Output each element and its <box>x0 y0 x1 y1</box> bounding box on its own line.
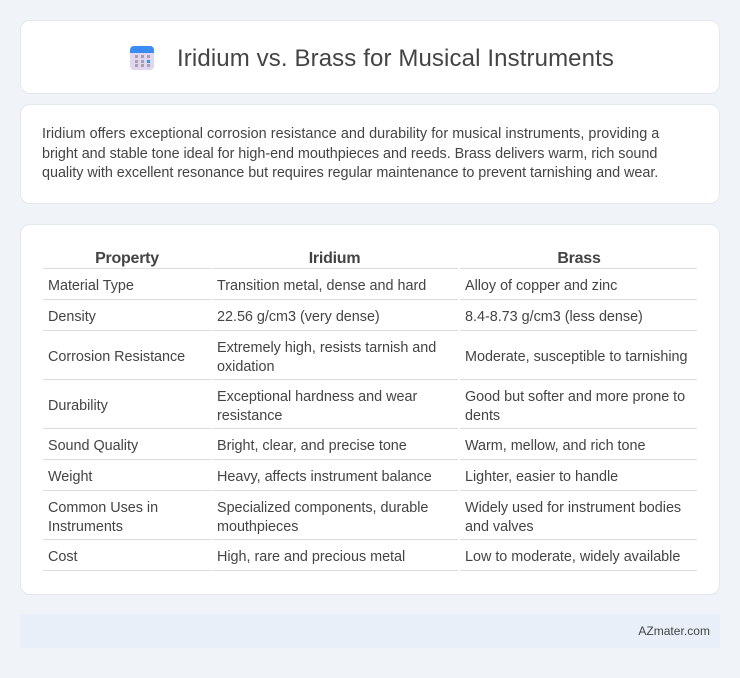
table header <box>95 250 601 267</box>
row: density: Density <box>48 309 96 325</box>
row: sound quality: Sound Quality <box>48 438 138 454</box>
row: durability: Durability <box>48 398 108 414</box>
row: material type <box>48 278 617 294</box>
row: corrosion resistance: Corrosion Resistance <box>48 349 185 365</box>
row: common uses <box>48 500 681 535</box>
row: weight <box>48 469 618 485</box>
row: sound quality: Bright, clear, and precise tone <box>217 438 407 454</box>
row: material type: Alloy of copper and zinc <box>465 278 617 294</box>
row: common uses: and valves <box>465 519 534 535</box>
row: weight: Heavy, affects instrument balance <box>217 469 432 485</box>
row: weight: Lighter, easier to handle <box>465 469 618 485</box>
summary text: bright and stable tone ideal for high-end mouthpieces and reeds. Brass delivers warm, rich sound <box>42 146 657 162</box>
comparison table panel <box>20 224 720 595</box>
row: corrosion resistance <box>48 340 687 375</box>
icon: calendar <box>130 46 154 70</box>
summary text <box>42 126 660 181</box>
row: sound quality <box>48 438 645 454</box>
summary card <box>20 104 720 204</box>
row: common uses: Common Uses in <box>48 500 158 516</box>
table header: Iridium <box>309 250 360 267</box>
row: cost: Low to moderate, widely available <box>465 549 680 565</box>
row: durability: Exceptional hardness and wear <box>217 389 417 405</box>
row: density: 22.56 g/cm3 (very dense) <box>217 309 380 325</box>
row: common uses: Specialized components, durable <box>217 500 428 516</box>
row: cost: High, rare and precious metal <box>217 549 405 565</box>
row: common uses: mouthpieces <box>217 519 298 535</box>
title: Iridium vs. Brass for Musical Instruments <box>177 45 614 72</box>
footer credit: AZmater.com <box>638 624 710 638</box>
table header: Property <box>95 250 159 267</box>
summary text: Iridium offers exceptional corrosion resistance and durability for musical instruments, providing a <box>42 126 659 142</box>
row dividers <box>43 268 697 571</box>
row: sound quality: Warm, mellow, and rich tone <box>465 438 645 454</box>
row: common uses: Widely used for instrument bodies <box>465 500 681 516</box>
row: weight: Weight <box>48 469 92 485</box>
row: material type: Material Type <box>48 278 134 294</box>
row: corrosion resistance: Extremely high, resists tarnish and <box>217 340 436 356</box>
row: cost <box>48 549 680 565</box>
row: material type: Transition metal, dense and hard <box>217 278 426 294</box>
row: durability: Good but softer and more prone to <box>465 389 685 405</box>
row: common uses: Instruments <box>48 519 123 535</box>
row: density <box>48 309 643 325</box>
summary text: quality with excellent resonance but requires regular maintenance to prevent tarnishing and wear. <box>42 165 658 181</box>
table header: Brass <box>557 250 601 267</box>
row: durability: dents <box>465 408 500 424</box>
row: cost: Cost <box>48 549 78 565</box>
row: corrosion resistance: Moderate, susceptible to tarnishing <box>465 349 687 365</box>
row: durability <box>48 389 685 424</box>
footer bar <box>20 614 720 648</box>
row: durability: resistance <box>217 408 282 424</box>
row: corrosion resistance: oxidation <box>217 359 274 375</box>
title card <box>20 20 720 94</box>
row: density: 8.4-8.73 g/cm3 (less dense) <box>465 309 643 325</box>
